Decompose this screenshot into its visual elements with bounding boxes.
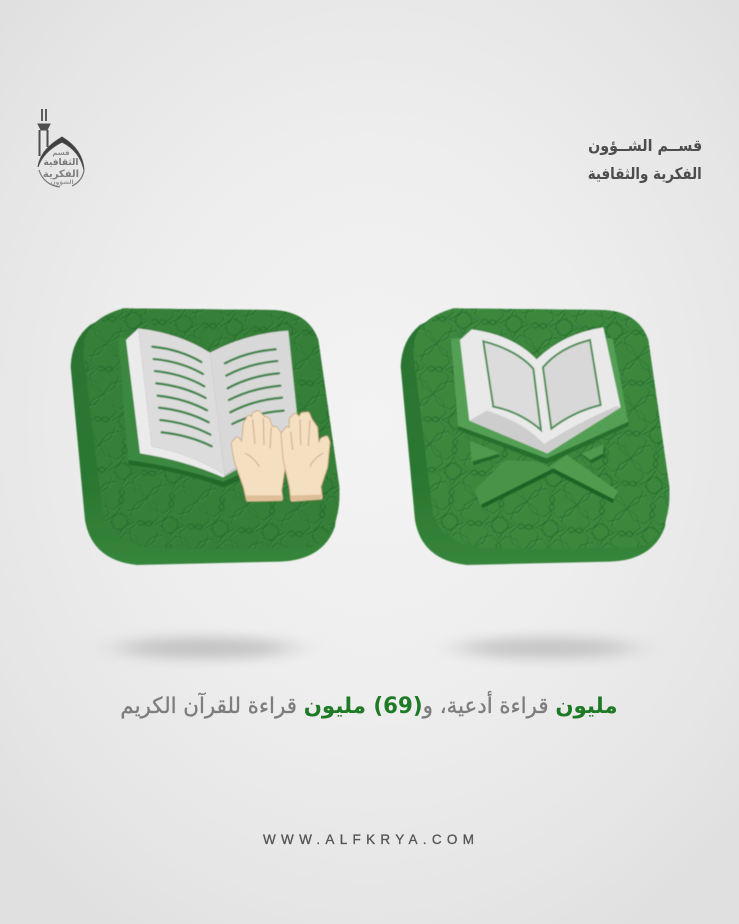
stand board: [451, 338, 629, 463]
right hand: [283, 414, 328, 501]
tile body: [71, 308, 339, 565]
stand back feet: [470, 441, 605, 465]
right page: [210, 331, 299, 475]
icon: right tile with Quran on stand: [401, 308, 669, 565]
icon: left floor shadow: [117, 637, 293, 659]
caption: readings statement: مليون قراءة أدعية، و(69) مليون قراءة للقرآن الكريم: [121, 694, 618, 719]
left hand: [233, 413, 283, 501]
book cover dark lower edge: [128, 445, 302, 487]
stand front legs: [475, 455, 618, 508]
icon: right floor shadow: [459, 637, 635, 659]
logo: minaret and dome: الفكرية: [43, 169, 79, 180]
icon: left tile with open book and praying hands: [71, 308, 339, 565]
book cover: [118, 333, 302, 487]
tile arabesque relief: [83, 308, 339, 549]
left page edge: [126, 328, 225, 477]
logo: minaret and dome: الشؤون: [50, 179, 74, 186]
stand board edge: [458, 422, 629, 464]
book edges: [460, 327, 621, 453]
tile top face: [413, 308, 669, 549]
heading: department line one: قســم الشــؤون: [588, 136, 702, 155]
logo: minaret and dome: قسم: [52, 149, 70, 157]
logo: minaret and dome: [38, 109, 84, 187]
tile top face: [83, 308, 339, 549]
logo: minaret and dome: الثقافية: [43, 158, 79, 168]
book bottom chamfer: [469, 406, 621, 453]
tile body: [401, 308, 669, 565]
heading: department line two: الفكرية والثقافية: [588, 164, 702, 183]
tile arabesque relief: [413, 308, 669, 549]
left page frame: [483, 341, 541, 430]
footer: website: WWW.ALFKRYA.COM: [263, 832, 479, 847]
right page lower edge: [223, 437, 300, 477]
text lines: [152, 347, 284, 446]
left page: [138, 328, 225, 475]
right page frame: [543, 340, 601, 429]
